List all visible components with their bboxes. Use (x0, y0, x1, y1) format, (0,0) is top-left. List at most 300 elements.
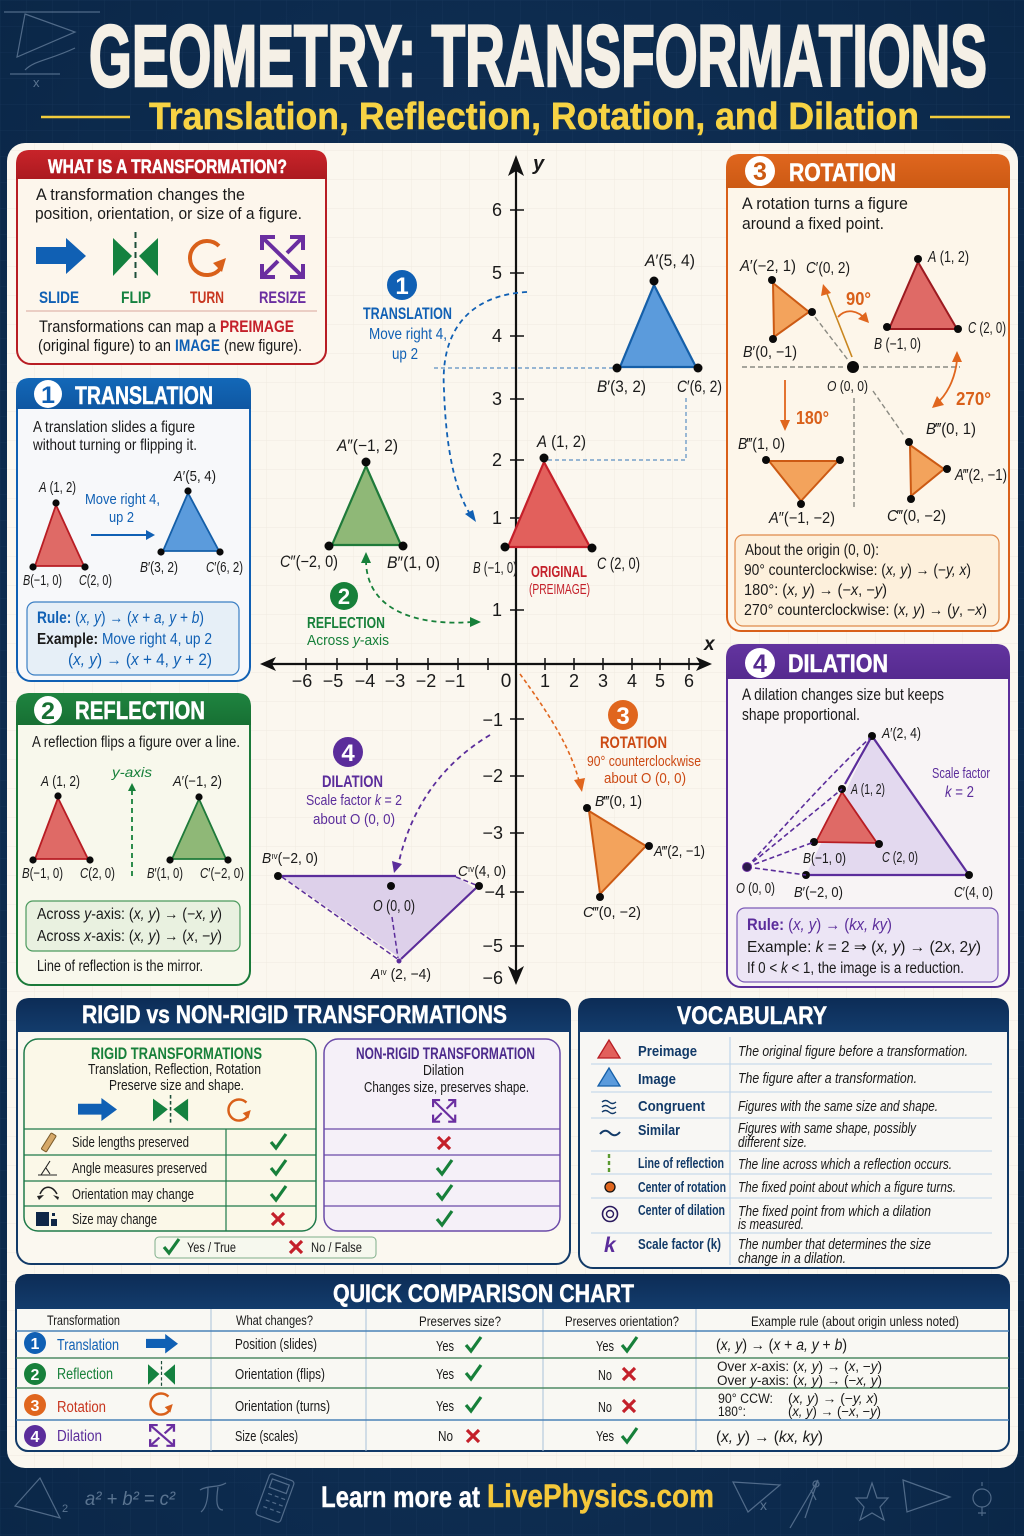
red preimage triangle: B(−1, 0) (22, 866, 63, 882)
heading (745, 648, 888, 678)
large image triangle: B′(−2, 0) (794, 884, 843, 901)
scale factor note: Scale factor (932, 765, 990, 782)
footer link text: LivePhysics.com (487, 1478, 714, 1514)
callout: 4 dilation: Scale factor k = 2 (306, 792, 402, 809)
callout: 4 dilation: about O (0, 0) (313, 811, 395, 828)
row: congruent (602, 1098, 938, 1115)
rule box: Rule: (x, y) → (kx, ky) (747, 916, 892, 934)
row: similar (600, 1120, 917, 1151)
row: angle measures: Angle measures preserved (72, 1161, 207, 1177)
row: dilation (24, 1425, 823, 1447)
panel: vocabulary (578, 998, 1009, 1268)
triangle: 90 degree image: A′(−2, 1) (739, 258, 796, 275)
triangle: red preimage: A (1, 2) (927, 249, 969, 266)
triangle: 90 degree image: C′(0, 2) (806, 260, 850, 277)
heading: TRANSLATION (75, 382, 213, 410)
red preimage triangle: A (1, 2) (38, 480, 76, 496)
dilation rays from center: O (0, 0) (736, 880, 775, 897)
triangle: blue image (597, 252, 722, 396)
callout: 1 translation: 1 (395, 273, 409, 300)
triangle: red preimage: C (2, 0) (597, 555, 640, 573)
triangle: green reflection: C″(−2, 0) (280, 553, 338, 571)
x axis: −5 (323, 671, 343, 691)
triangle: purple dilation: B (262, 850, 271, 867)
dashed axes from center (742, 317, 960, 507)
rule box (737, 908, 998, 982)
triangle: orange rotation: B‴(0, 1) (595, 793, 642, 810)
rule box: Example: k = 2 ⇒ (x, y) → (2x, 2y) (747, 939, 981, 956)
heading: 4 (753, 650, 767, 678)
red preimage triangle: C(2, 0) (79, 573, 112, 589)
large image triangle (794, 725, 993, 901)
arrow: move right 4 up 2: Move right 4, (85, 491, 160, 508)
red preimage triangle: B(−1, 0) (23, 573, 62, 589)
arrow: reflection (361, 552, 481, 627)
row: line of reflection: Line of reflection (638, 1156, 724, 1172)
row: dilation: No (438, 1428, 453, 1445)
row: orientation (37, 1186, 286, 1203)
y axis: 1 (492, 508, 502, 528)
large image triangle: C′(4, 0) (954, 884, 993, 901)
callout: 4 dilation: DILATION (322, 773, 383, 791)
triangle: 270 degree image (887, 421, 1007, 525)
rule box: Across y-axis: (x, y) → (−x, y) (37, 906, 222, 923)
triangle: 180 degree image (738, 436, 844, 527)
rule box (26, 901, 240, 951)
rule box: (x, y) → (x + 4, y + 2) (68, 651, 212, 669)
text block: preimage and image: (new figure). (224, 336, 302, 355)
icon: turn (190, 241, 226, 307)
triangle: red preimage: (PREIMAGE) (529, 581, 590, 598)
table header: Preserves orientation? (565, 1313, 679, 1329)
text block: without turning or flipping it. (32, 437, 197, 454)
row: angle measures (38, 1160, 286, 1177)
small preimage triangle: B(−1, 0) (803, 850, 846, 867)
x axis: −6 (292, 671, 312, 691)
text block: position, orientation, or size of a figure. (35, 204, 302, 223)
red preimage triangle: A (1, 2) (40, 774, 80, 790)
row: size (36, 1212, 284, 1228)
table header: Transformation (47, 1312, 120, 1328)
row: preimage (598, 1040, 968, 1060)
text block: Line of reflection is the mirror. (37, 958, 203, 975)
row: scale factor (604, 1234, 931, 1267)
row: reflection: Over x-axis: (x, y) → (x, −y) (717, 1359, 882, 1374)
row: rotation: 180°: (718, 1404, 746, 1419)
text block: A dilation changes size but keeps (742, 686, 944, 704)
footer doodles right (733, 1480, 991, 1528)
heading: WHAT IS A TRANSFORMATION? (48, 157, 287, 178)
y axis: −5 (482, 936, 503, 956)
green image triangle (147, 774, 244, 882)
callout: 3 rotation: 90° counterclockwise (587, 753, 701, 770)
triangle: purple dilation: O (0, 0) (373, 898, 415, 915)
row: dilation: Yes (596, 1428, 614, 1445)
triangle: purple dilation: A (370, 966, 380, 983)
row: congruent: Congruent (638, 1098, 705, 1115)
triangle: 270 degree image: A‴(2, −1) (954, 467, 1007, 484)
icon: resize: RESIZE (259, 288, 306, 307)
heading: QUICK COMPARISON CHART (333, 1280, 634, 1308)
column: rigid transformations: Translation, Reflection, Rotation (88, 1062, 261, 1078)
row: orientation: Orientation may change (72, 1187, 194, 1203)
row: rotation (24, 1391, 881, 1419)
text block: A reflection flips a figure over a line. (32, 734, 240, 751)
chart: coordinate plane (260, 153, 722, 988)
row: similar: Figures with same shape, possibly (738, 1120, 917, 1137)
row: center of rotation: Center of rotation (638, 1180, 726, 1196)
green image triangle: A′(−1, 2) (172, 774, 222, 790)
row: scale factor: change in a dilation. (738, 1250, 846, 1267)
callout: 3 rotation: about O (0, 0) (604, 770, 686, 787)
y axis: −4 (484, 882, 505, 902)
heading (34, 380, 213, 410)
y-axis line of reflection: y-axis (111, 764, 152, 780)
triangle: red preimage: B (−1, 0) (874, 336, 921, 353)
callout: 3 rotation: 3 (616, 703, 630, 730)
row: translation (24, 1332, 847, 1355)
row: center of dilation: is measured. (738, 1216, 804, 1233)
heading (34, 696, 205, 725)
y axis: 6 (492, 200, 502, 220)
center O (827, 361, 868, 395)
legend (155, 1237, 376, 1258)
x axis: −4 (355, 671, 375, 691)
x axis: x (703, 634, 716, 655)
callout: 1 translation: up 2 (392, 346, 418, 363)
row: center of dilation (602, 1203, 931, 1233)
column: rigid transformations (24, 1039, 316, 1231)
arrow: move right 4 up 2: up 2 (109, 509, 134, 526)
panel: translation (16, 378, 251, 681)
scale factor note: k = 2 (945, 784, 974, 801)
y axis: 4 (492, 326, 502, 346)
row: reflection: Over y-axis: (x, y) → (−x, y) (717, 1373, 882, 1388)
icon: flip: FLIP (121, 288, 151, 307)
table header (47, 1312, 959, 1329)
row: translation: 1 (31, 1336, 40, 1353)
text block: preimage and image: Transformations can map a (39, 317, 216, 336)
row: dilation: 4 (31, 1429, 40, 1446)
arrows: angles: 270° (956, 389, 991, 409)
column: non-rigid transformation: Changes size, preserves shape. (364, 1080, 529, 1096)
rule box: 270° counterclockwise: (x, y) → (y, −x) (744, 602, 987, 619)
text block: shape proportional. (742, 706, 860, 724)
callout: 4 dilation (306, 737, 402, 828)
triangle: red preimage: A (1, 2) (536, 433, 586, 451)
text block (32, 419, 197, 454)
row: side lengths: Side lengths preserved (72, 1135, 189, 1151)
triangle: orange rotation (583, 793, 705, 921)
row: similar: different size. (738, 1134, 807, 1151)
heading: VOCABULARY (677, 1002, 827, 1030)
triangle: red preimage: B (−1, 0) (473, 560, 517, 577)
triangle: green reflection (280, 437, 440, 572)
callout: 3 rotation: ROTATION (600, 734, 667, 752)
heading: REFLECTION (75, 697, 205, 725)
triangle: red preimage: ORIGINAL (531, 564, 587, 581)
blue image triangle (140, 469, 243, 576)
row: reflection: Orientation (flips) (235, 1366, 325, 1383)
callout: 1 translation: Move right 4, (369, 326, 447, 343)
triangle: purple dilation (262, 850, 506, 983)
row: rotation: (x, y) → (−y, x) (788, 1391, 878, 1406)
row: translation: Yes (596, 1338, 614, 1355)
footer doodles left: a² + b² = c² (85, 1489, 176, 1510)
icon: slide: SLIDE (39, 288, 79, 307)
red preimage triangle (23, 480, 112, 589)
doodle: triangle sketch top left: x (33, 75, 40, 90)
blue image triangle: A′(5, 4) (173, 469, 216, 485)
rule box: 180°: (x, y) → (−x, −y) (744, 582, 887, 599)
y axis: −1 (482, 710, 503, 730)
icon: flip (113, 232, 158, 307)
small preimage triangle (803, 781, 918, 867)
x axis: −2 (416, 671, 436, 691)
x axis: 5 (655, 671, 665, 691)
panel: quick comparison chart (15, 1274, 1010, 1451)
x axis: 1 (540, 671, 550, 691)
triangle: green reflection: A″(−1, 2) (336, 437, 398, 455)
row: image (598, 1068, 917, 1088)
blue image triangle: C′(6, 2) (206, 560, 243, 576)
callout: 4 dilation: 4 (341, 740, 355, 767)
row: translation: (x, y) → (x + a, y + b) (716, 1337, 847, 1354)
y axis: 1 (492, 600, 502, 620)
x axis: −3 (385, 671, 405, 691)
triangle: blue image: C′(6, 2) (677, 378, 722, 396)
row: line of reflection (609, 1154, 952, 1173)
text block (35, 185, 302, 223)
legend: Yes / True (187, 1240, 236, 1255)
row: similar: Similar (638, 1122, 680, 1139)
callout: 1 translation: TRANSLATION (363, 304, 452, 323)
row: scale factor: k (604, 1234, 617, 1257)
y axis: y (532, 153, 545, 175)
triangle: 90 degree image: B′(0, −1) (743, 344, 797, 361)
triangle: 270 degree image: C‴(0, −2) (887, 508, 946, 525)
triangle: purple dilation: ıv (380, 967, 387, 977)
column: non-rigid transformation: NON-RIGID TRANSFORMATION (356, 1044, 535, 1063)
y axis: −2 (482, 766, 503, 786)
text block: A translation slides a figure (33, 419, 195, 436)
footer doodles left: 2 (62, 1503, 68, 1515)
row: rotation: Orientation (turns) (235, 1398, 330, 1415)
y axis: 3 (492, 389, 502, 409)
triangle: orange rotation: A‴(2, −1) (653, 843, 705, 860)
table header: Preserves size? (419, 1313, 501, 1329)
text block: preimage and image: IMAGE (175, 336, 220, 355)
text block: preimage and image: PREIMAGE (220, 317, 294, 336)
table header: What changes? (236, 1312, 313, 1328)
rule box (27, 602, 239, 675)
row: dilation: Dilation (57, 1428, 102, 1445)
y axis: −6 (482, 968, 503, 988)
triangle: purple dilation: (−2, 0) (278, 850, 318, 867)
arrow: move right 4 up 2 (85, 491, 160, 540)
rule box: Example: Move right 4, up 2 (37, 631, 212, 648)
row: reflection: Reflection (57, 1366, 113, 1383)
triangle: purple dilation: C (458, 863, 468, 880)
arrow: rotation (520, 674, 585, 792)
panel: rigid vs non-rigid (16, 998, 571, 1264)
row: center of dilation: Center of dilation (638, 1203, 725, 1219)
column: rigid transformations: Preserve size and shape. (109, 1078, 244, 1094)
rule box: If 0 < k < 1, the image is a reduction. (747, 960, 964, 977)
y axis: 2 (492, 450, 502, 470)
column: non-rigid transformation: Dilation (423, 1063, 464, 1079)
x axis: 4 (627, 671, 637, 691)
doodle: triangle sketch top left (4, 12, 100, 90)
arrows: angles: 90° (846, 289, 871, 309)
triangle: purple dilation: (4, 0) (474, 863, 506, 880)
triangle: red preimage: C (2, 0) (968, 320, 1006, 337)
triangle: purple dilation: ıv (468, 864, 475, 874)
row: dilation: (x, y) → (kx, ky) (716, 1429, 823, 1446)
callout: 1 translation (363, 270, 452, 363)
row: congruent: Figures with the same size and shape. (738, 1098, 938, 1115)
row: dilation: Size (scales) (235, 1428, 298, 1445)
green image triangle: B′(1, 0) (147, 866, 183, 882)
column: non-rigid transformation (324, 1039, 560, 1231)
footer link text: Learn more at (321, 1481, 480, 1514)
small preimage triangle: A (1, 2) (850, 781, 885, 798)
column: rigid transformations: RIGID TRANSFORMATIONS (91, 1044, 262, 1063)
callout: 2 reflection: REFLECTION (307, 615, 385, 632)
triangle: 270 degree image: B‴(0, 1) (926, 421, 976, 438)
row: rotation: No (598, 1399, 612, 1416)
triangle: red preimage (473, 433, 640, 598)
heading: 1 (41, 382, 55, 409)
row: scale factor: Scale factor (k) (638, 1237, 721, 1253)
large image triangle: A′(2, 4) (881, 725, 921, 742)
heading: 3 (753, 158, 767, 186)
row: rotation: Rotation (57, 1399, 106, 1416)
table header: Example rule (about origin unless noted) (751, 1313, 959, 1329)
row: center of dilation: The fixed point from which a dilation (738, 1203, 931, 1220)
text block (742, 195, 908, 233)
green image triangle: C′(−2, 0) (200, 866, 244, 882)
callout: 3 rotation (587, 700, 701, 787)
row: preimage: Preimage (638, 1043, 697, 1060)
rule box: Across x-axis: (x, y) → (x, −y) (37, 928, 222, 945)
row: side lengths (41, 1133, 286, 1152)
scale factor note (932, 765, 990, 801)
x axis: 6 (684, 671, 694, 691)
triangle: 90 degree image (739, 258, 850, 361)
triangle: orange rotation: C‴(0, −2) (583, 904, 641, 921)
heading: DILATION (788, 650, 888, 678)
row: size: Size may change (72, 1212, 157, 1228)
row: translation: Yes (436, 1338, 454, 1355)
triangle: 180 degree image: A″(−1, −2) (768, 510, 835, 527)
row: translation: Translation (57, 1337, 119, 1354)
legend: No / False (311, 1240, 362, 1255)
subtitle: Translation, Reflection, Rotation, and Dilation (149, 96, 919, 138)
text block: A rotation turns a figure (742, 195, 908, 213)
text block: around a fixed point. (742, 215, 884, 233)
arrow: dilation (392, 735, 490, 873)
heading (745, 156, 896, 187)
x axis: −1 (445, 671, 465, 691)
row: rotation: 90° CCW: (718, 1391, 773, 1406)
rule box: 90° counterclockwise: (x, y) → (−y, x) (744, 562, 971, 579)
red preimage triangle: C(2, 0) (80, 866, 115, 882)
heading: ROTATION (789, 159, 896, 187)
triangle: green reflection: B″(1, 0) (387, 554, 440, 572)
y axis: 5 (492, 263, 502, 283)
small preimage triangle: C (2, 0) (882, 849, 918, 866)
heading: 2 (41, 698, 55, 725)
x axis: 0 (501, 671, 511, 692)
heading: RIGID vs NON-RIGID TRANSFORMATIONS (82, 1001, 507, 1029)
icon: resize (259, 237, 306, 307)
footer doodles right: x (760, 1497, 767, 1513)
text block: preimage and image (38, 317, 302, 355)
row: preimage: The original figure before a transformation. (738, 1043, 968, 1060)
triangle: blue image: A′(5, 4) (644, 252, 695, 270)
arrow: translation (444, 292, 527, 522)
row: reflection: No (598, 1367, 612, 1384)
row: scale factor: The number that determines the size (738, 1236, 931, 1253)
x axis: 2 (569, 671, 579, 691)
red preimage triangle (22, 774, 115, 882)
row: rotation: (x, y) → (−x, −y) (788, 1404, 881, 1419)
rule box: About the origin (0, 0): (745, 542, 879, 559)
arrows: angles: 180° (796, 408, 829, 428)
row: center of rotation (605, 1179, 956, 1196)
row: reflection: 2 (31, 1367, 40, 1384)
row: image: Image (638, 1071, 676, 1088)
row: reflection (24, 1359, 882, 1388)
row: rotation: Yes (436, 1398, 454, 1415)
rule box: Rule: (x, y) → (x + a, y + b) (37, 609, 204, 627)
row: line of reflection: The line across which a reflection occurs. (738, 1156, 952, 1173)
x axis: 3 (598, 671, 608, 691)
footer doodles left (15, 1473, 295, 1523)
triangle: purple dilation: (2, −4) (387, 966, 431, 983)
y axis (482, 153, 545, 988)
panel: dilation (726, 644, 1010, 987)
panel: rotation (726, 154, 1010, 631)
triangle: red preimage (874, 249, 1006, 353)
row: translation: Position (slides) (235, 1336, 317, 1353)
y axis: −3 (482, 823, 503, 843)
callout: 2 reflection: 2 (338, 584, 350, 609)
text block: preimage and image: (original figure) to an (38, 336, 171, 355)
panel: reflection (16, 693, 251, 985)
arrows: angles (780, 284, 991, 431)
triangle: purple dilation: ıv (271, 851, 278, 861)
x axis (260, 634, 716, 692)
triangle: 180 degree image: B‴(1, 0) (738, 436, 785, 453)
callout: 2 reflection (307, 582, 389, 649)
panel: what is a transformation (16, 150, 327, 364)
icon: turn: TURN (190, 288, 224, 307)
blue image triangle: B′(3, 2) (140, 560, 178, 576)
dilation rays from center (736, 738, 870, 897)
row: rotation: 3 (31, 1398, 40, 1415)
rule box (735, 535, 999, 626)
row: reflection: Yes (436, 1366, 454, 1383)
text block (742, 686, 944, 724)
callout: 2 reflection: Across y-axis (307, 632, 389, 649)
y-axis line of reflection (111, 764, 152, 878)
row: image: The figure after a transformation. (738, 1070, 917, 1087)
footer link text (321, 1478, 714, 1514)
triangle: blue image: B′(3, 2) (597, 378, 646, 396)
guide lines (434, 368, 686, 460)
